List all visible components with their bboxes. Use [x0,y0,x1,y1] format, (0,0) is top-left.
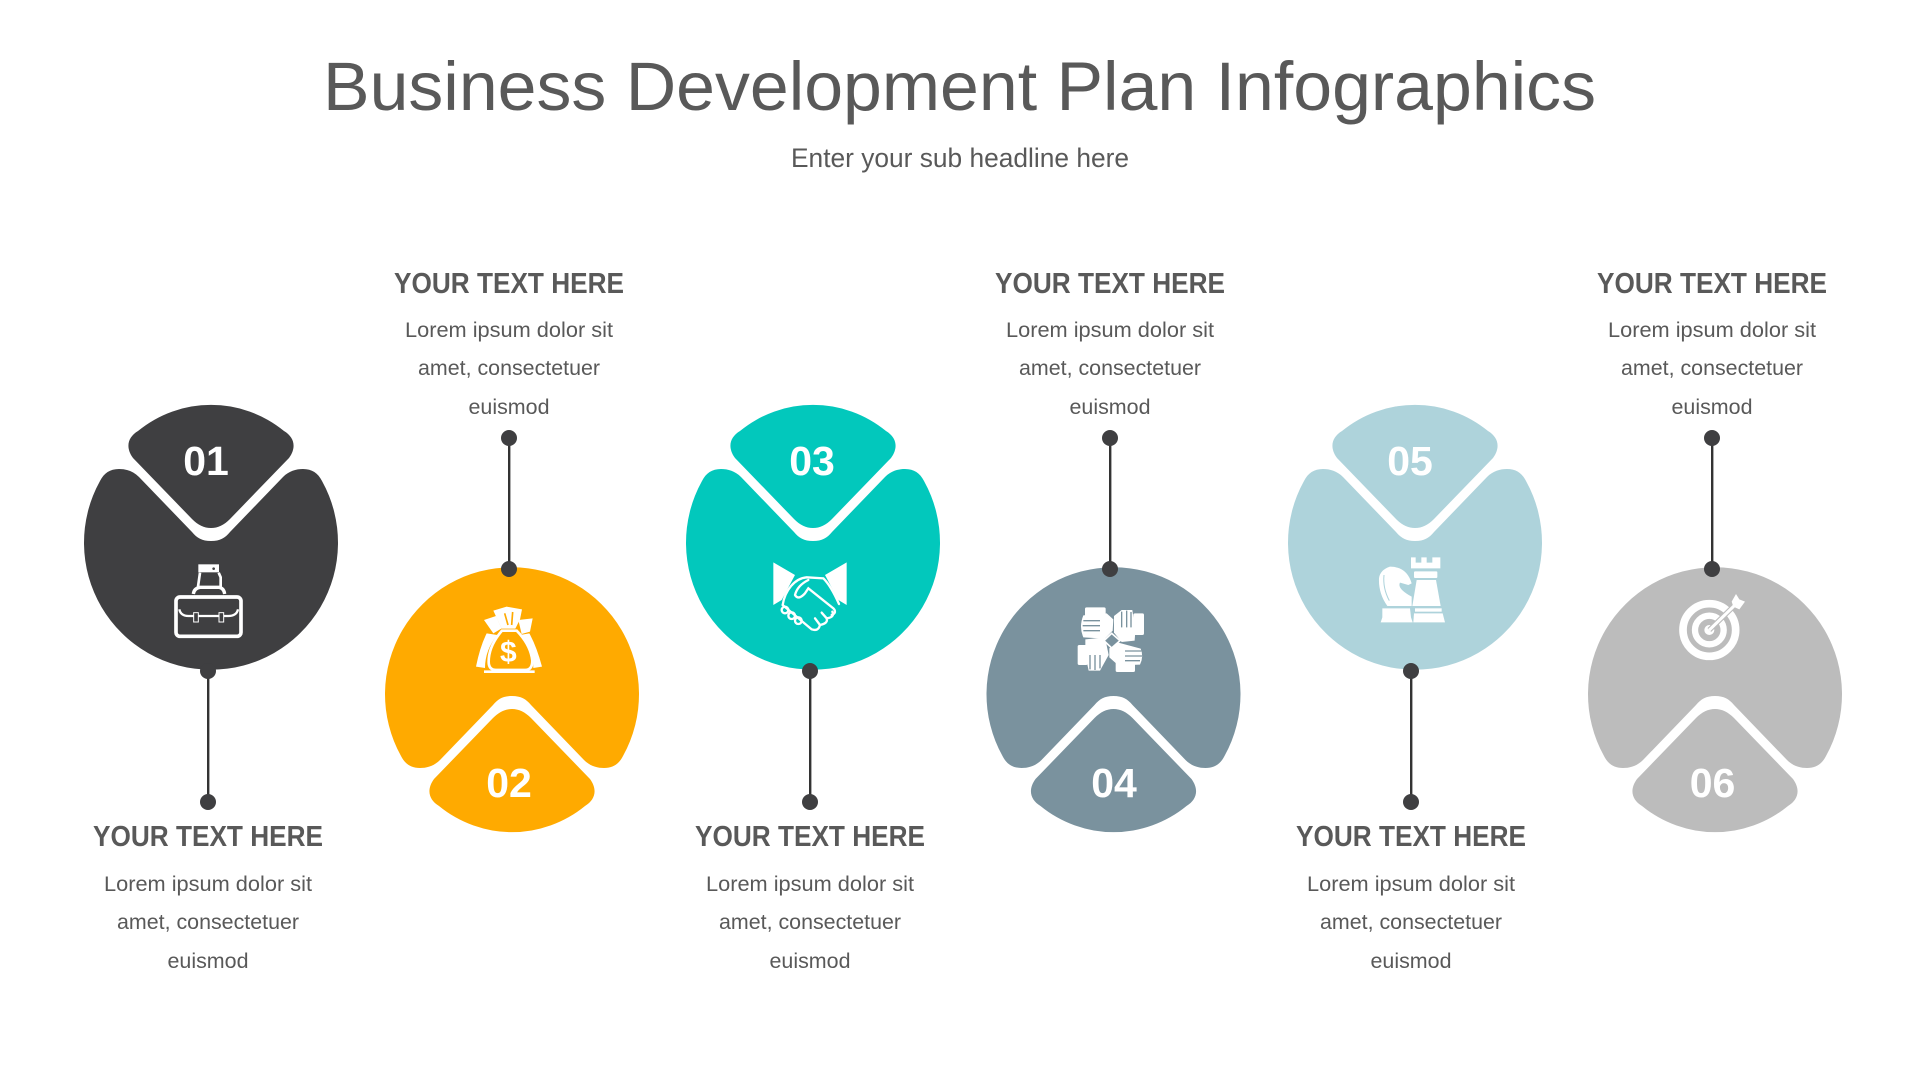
text block 06: amet, consectetuer [1621,357,1803,380]
text block 02: Lorem ipsum dolor sit [405,319,613,342]
petal shape 04 [1031,709,1196,832]
text block 06: YOUR TEXT HERE [1597,268,1827,300]
body shape 04 [986,567,1240,768]
text block 06: euismod [1672,396,1752,419]
number 05: 05 [1387,438,1433,484]
connector 06 [1704,430,1720,577]
panel: step 06 [1588,268,1842,832]
icon: money bag [476,607,542,672]
text block 06: Lorem ipsum dolor sit [1608,319,1816,342]
petal shape 05 [1332,405,1498,528]
connector 02 [501,430,517,577]
icon: handshake [773,562,847,630]
text block 01 [93,821,323,973]
text block 04: euismod [1070,396,1150,419]
number 04: 04 [1091,760,1137,806]
icon: target with arrow [1683,594,1745,656]
body shape 06 [1588,567,1842,768]
petal shape 03 [730,405,896,528]
petal shape 01 [128,405,294,528]
text block 03 [695,821,925,973]
text block 05: Lorem ipsum dolor sit [1307,873,1515,896]
text block 03: YOUR TEXT HERE [695,821,925,853]
panel: step 05 [1288,405,1542,973]
connector 01 [200,663,216,810]
body shape 05 [1288,469,1542,670]
icon: money bag: $ [500,636,517,669]
panel: step 03 [686,405,940,973]
number 02: 02 [486,760,532,806]
text block 04 [995,268,1225,419]
body shape 02 [385,567,639,768]
text block 01: Lorem ipsum dolor sit [104,873,312,896]
text block 05 [1296,821,1526,973]
icon: briefcase in hand [176,564,241,636]
text block 02: amet, consectetuer [418,357,600,380]
connector 03 [802,663,818,810]
panel: step 01 [84,405,338,973]
text block 05: YOUR TEXT HERE [1296,821,1526,853]
text block 04: Lorem ipsum dolor sit [1006,319,1214,342]
panel: step 02 [385,268,639,832]
title: Business Development Plan Infographics [323,48,1596,125]
subtitle: Enter your sub headline here [791,143,1129,173]
text block 01: amet, consectetuer [117,911,299,934]
text block 01: euismod [168,950,248,973]
text block 01: YOUR TEXT HERE [93,821,323,853]
text block 06 [1597,268,1827,419]
text block 02 [394,268,624,419]
icon: four joined hands [1078,607,1144,672]
text block 04: amet, consectetuer [1019,357,1201,380]
text block 05: amet, consectetuer [1320,911,1502,934]
text block 05: euismod [1370,950,1452,973]
text block 04: YOUR TEXT HERE [995,268,1225,300]
petal shape 02 [429,709,595,832]
panel: step 04 [986,268,1240,832]
text block 02: YOUR TEXT HERE [394,268,624,300]
icon: chess rook and knight [1379,557,1445,622]
text block 03: Lorem ipsum dolor sit [706,873,914,896]
body shape 01 [84,469,338,670]
number 03: 03 [789,438,835,484]
text block 03: amet, consectetuer [719,911,901,934]
number 06: 06 [1690,760,1735,806]
text block 02: euismod [468,396,550,419]
text block 03: euismod [770,950,850,973]
petal shape 06 [1632,709,1798,832]
number 01: 01 [183,438,229,484]
connector 04 [1102,430,1118,577]
body shape 03 [686,469,940,670]
connector 05 [1403,663,1419,810]
